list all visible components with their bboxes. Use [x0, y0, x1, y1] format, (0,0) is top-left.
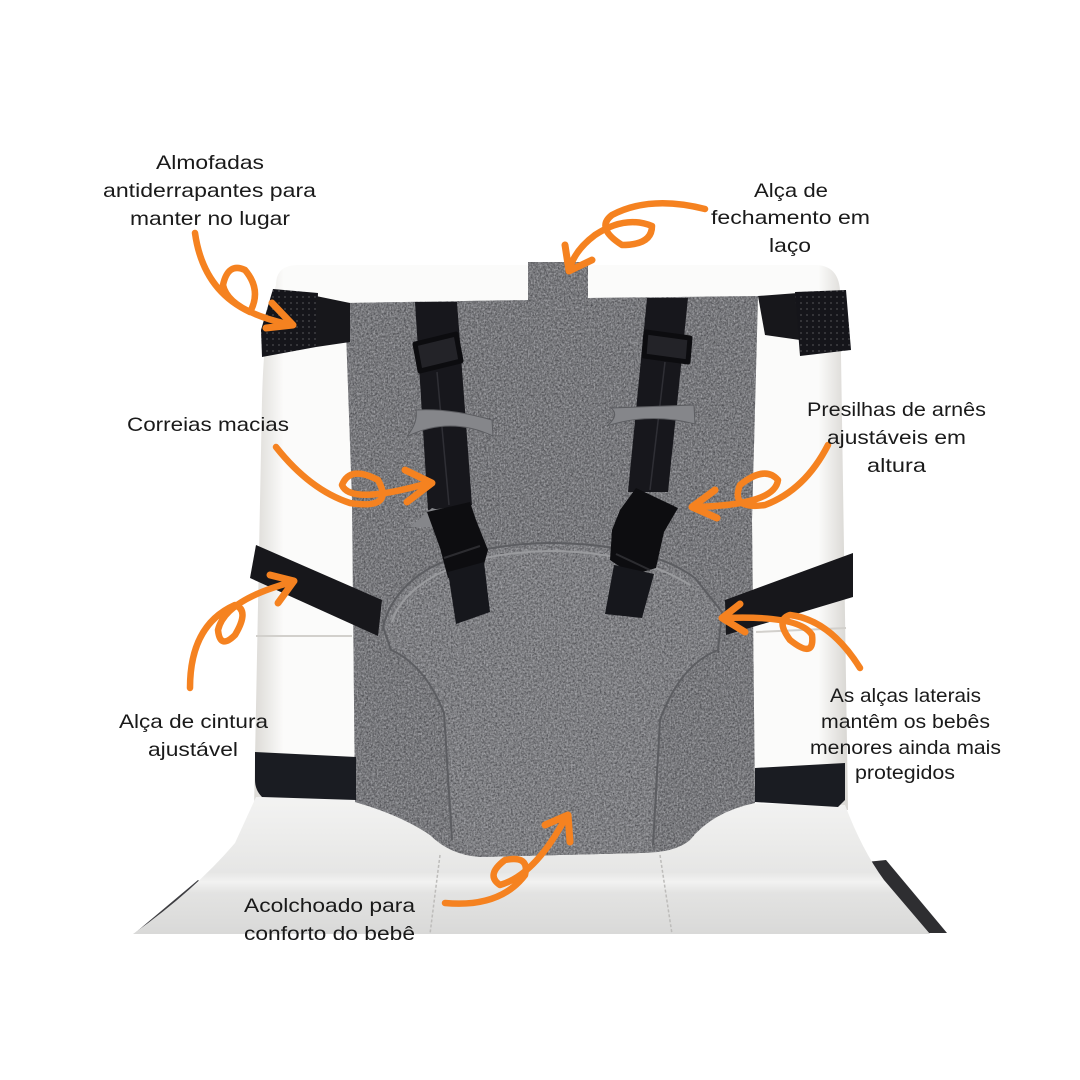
label: waist strap: ajustável [148, 739, 238, 761]
chair backrest [254, 265, 848, 810]
right strap lower [605, 565, 654, 618]
arrow: waist strap [190, 575, 294, 688]
left plastic buckle [427, 502, 488, 578]
label: padding: conforto do bebê [244, 923, 415, 945]
harness left [408, 302, 493, 624]
chair [133, 265, 947, 934]
grey fabric seat pad [345, 262, 758, 857]
label: height-adjustable harness loops: Presilhas de arnês [807, 399, 986, 421]
arrow: side straps [722, 604, 860, 668]
label: side straps [810, 685, 1001, 784]
label: loop closure strap: laço [769, 235, 811, 257]
right slider buckle [644, 332, 690, 362]
right plastic buckle [610, 488, 678, 575]
label: height-adjustable harness loops: altura [867, 455, 926, 477]
left fabric loop [408, 410, 493, 436]
top left anti-slip pad [261, 289, 318, 357]
top left strap [316, 296, 350, 347]
label: loop closure strap: fechamento em [711, 207, 870, 229]
label: height-adjustable harness loops: ajustáveis em [827, 427, 966, 449]
label: anti-slip pads: manter no lugar [130, 208, 291, 230]
lower left strap [255, 752, 356, 800]
lower right strap [755, 763, 845, 807]
left waist strap [250, 545, 382, 636]
chair seat [133, 797, 930, 934]
label: side straps: mantêm os bebês [821, 711, 990, 733]
arrow: anti-slip pads [195, 233, 293, 328]
label: side straps: protegidos [855, 762, 955, 784]
label: anti-slip pads [103, 152, 316, 230]
right fabric loop [607, 405, 695, 426]
label: waist strap: Alça de cintura [119, 711, 268, 733]
left strap upper [415, 302, 472, 510]
arrow: soft straps [276, 447, 432, 504]
label: side straps: menores ainda mais [810, 737, 1001, 759]
label: anti-slip pads: Almofadas [156, 152, 264, 174]
label: height-adjustable harness loops [807, 399, 986, 477]
top right anti-slip pad [795, 290, 851, 356]
label: loop closure strap [711, 180, 870, 257]
side straps [250, 289, 853, 807]
label: loop closure strap: Alça de [754, 180, 828, 202]
label: padding: Acolchoado para [244, 895, 415, 917]
harness right [605, 298, 695, 618]
label: side straps: As alças laterais [830, 685, 981, 707]
right waist strap [725, 553, 853, 635]
arrow: loop closure strap [565, 203, 705, 271]
arrow: padding [445, 815, 570, 904]
label: waist strap [119, 711, 268, 761]
arrow: height-adjustable harness loops [692, 445, 828, 518]
chair side frame [135, 880, 206, 933]
right strap upper [628, 298, 688, 492]
label: padding [244, 895, 415, 945]
left buckle side tabs [410, 508, 492, 531]
left strap lower [448, 562, 490, 624]
top right strap [758, 293, 800, 340]
left slider buckle [415, 334, 461, 371]
padded cushion [383, 543, 722, 857]
label: soft straps: Correias macias [127, 414, 289, 436]
label: anti-slip pads: antiderrapantes para [103, 180, 316, 202]
